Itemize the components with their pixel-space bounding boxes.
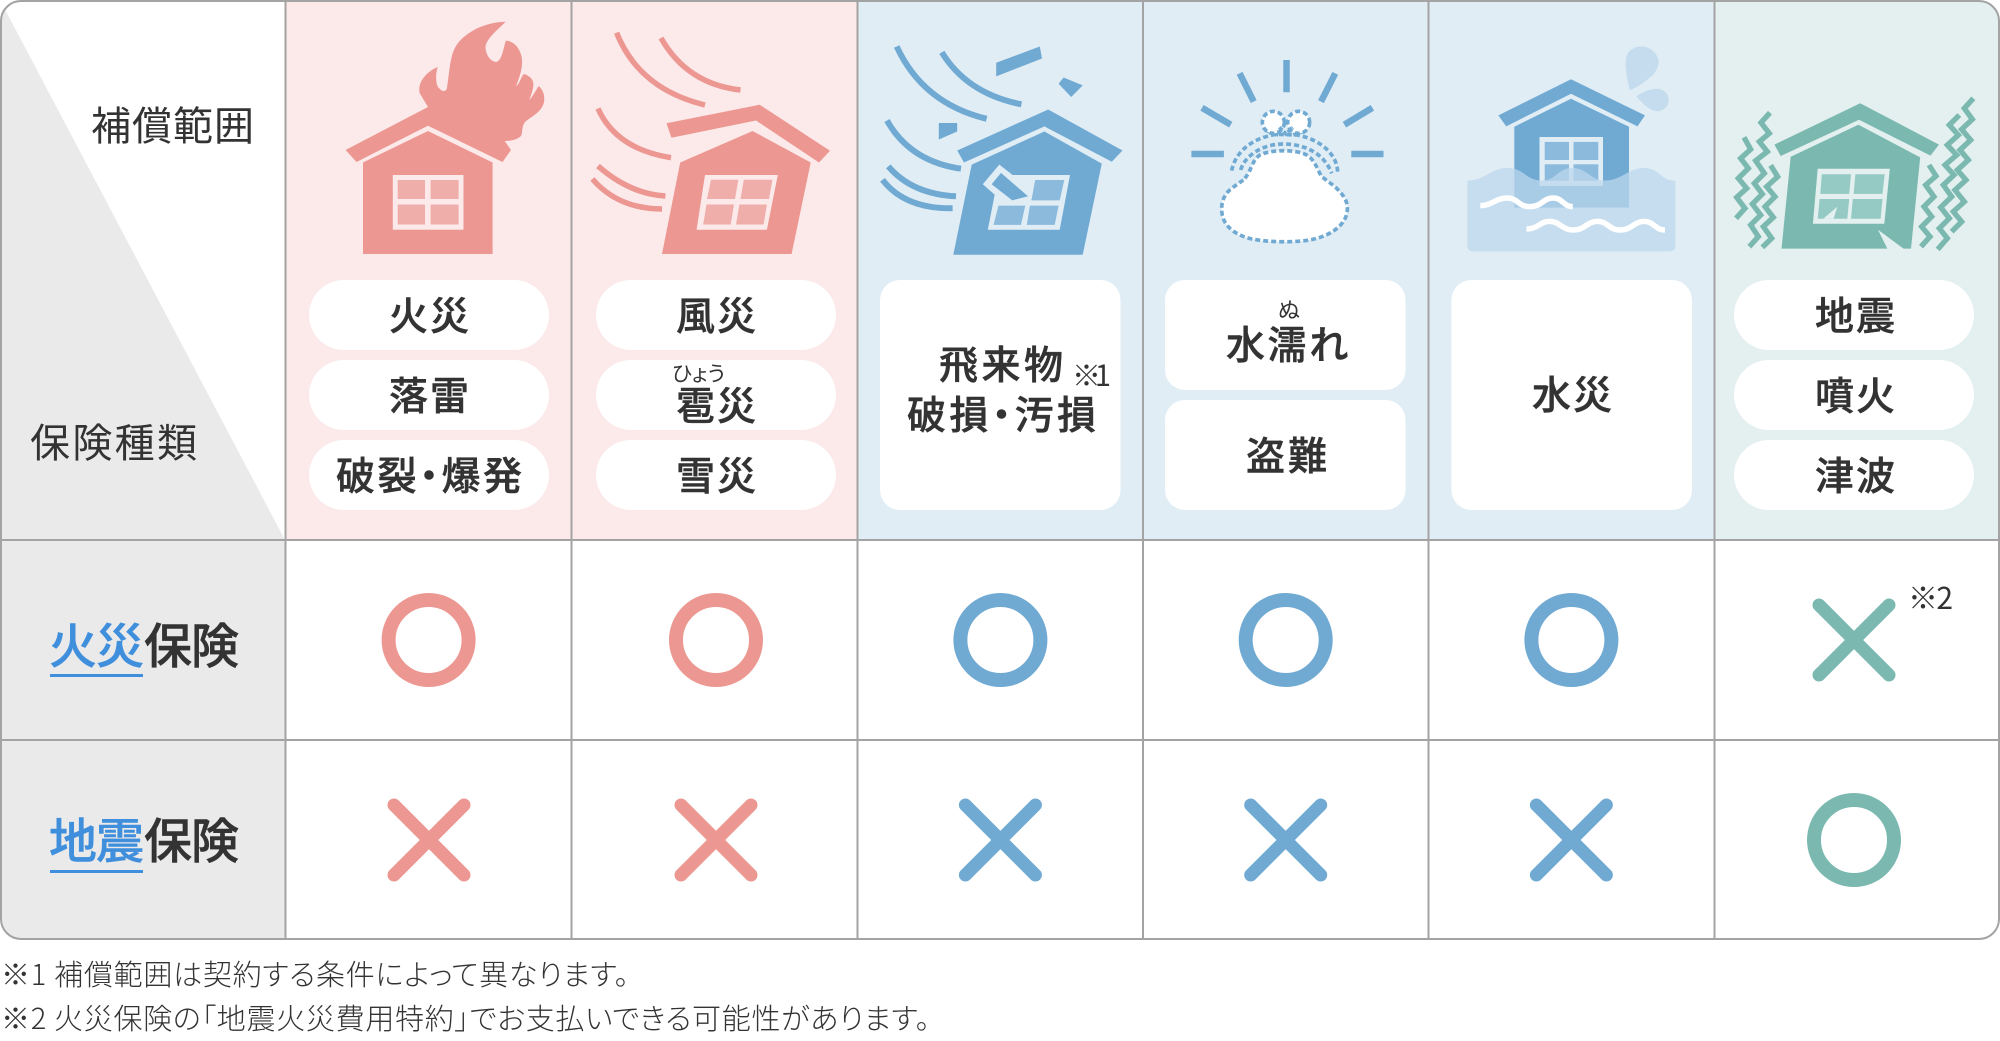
mark: cross wind (681, 805, 751, 875)
card: flying object damage: ※1 (1072, 353, 1111, 395)
icon: house in wind (592, 33, 830, 254)
row label: fire insurance (49, 607, 239, 677)
row label: fire insurance: 火災 (49, 607, 144, 677)
mark: circle wind (676, 600, 756, 680)
mark: circle fire (389, 600, 469, 680)
panel: earthquake column (1715, 1, 2000, 540)
heading: coverage scope: 補償範囲 (91, 94, 254, 152)
row label: earthquake insurance: 保険 (144, 802, 239, 872)
pill: explosion: 破裂・爆発 (336, 446, 522, 502)
pill: earthquake: 地震 (1815, 286, 1895, 342)
icon: house in earthquake (1736, 98, 1973, 249)
panel: fire insurance row (0, 541, 1953, 740)
footnote 1: ※1 補償範囲は契約する条件によって異なります。 (1, 952, 629, 994)
panel: fire column (286, 1, 572, 540)
mark: circle flying object (960, 600, 1040, 680)
pill: theft: 盗難 (1246, 426, 1327, 482)
card: flying object damage: 飛来物 (939, 335, 1063, 391)
mark: cross water leak (1251, 805, 1321, 875)
panel: flying object column (858, 1, 1143, 540)
icon: flooded house (1467, 46, 1675, 251)
mark: cross flood (1536, 805, 1606, 875)
panel: header corner (0, 0, 285, 540)
row label: fire insurance: 保険 (144, 607, 239, 677)
pill: explosion (309, 440, 549, 510)
pill: snow: 雪災 (676, 446, 756, 502)
pill: hail: ひょう (672, 358, 725, 388)
mark: circle flood (1531, 600, 1611, 680)
panel: wind column (572, 1, 858, 540)
pill: eruption (1734, 360, 1974, 430)
mark: cross flying object (965, 805, 1035, 875)
pill: earthquake (1734, 280, 1974, 350)
pill: water leak: ぬ (1278, 293, 1300, 325)
pill: tsunami: 津波 (1815, 446, 1895, 502)
row label: earthquake insurance (49, 802, 239, 873)
pill: fire (309, 280, 549, 350)
card: flying object damage: 破損・汚損 (907, 385, 1096, 441)
mark: circle earthquake (1814, 800, 1894, 880)
card: flood (1451, 280, 1692, 510)
mark: circle water leak (1246, 600, 1326, 680)
mark: cross fire (394, 805, 464, 875)
pill: eruption: 噴火 (1815, 366, 1895, 422)
pill: theft (1165, 400, 1406, 510)
pill: lightning: 落雷 (389, 366, 469, 422)
pill: tsunami (1734, 440, 1974, 510)
card: flood: 水災 (1532, 365, 1612, 421)
icon: purse (1191, 60, 1384, 242)
pill: water leak (1165, 280, 1406, 390)
card: flying object damage (880, 280, 1120, 510)
panel: water leak and theft column (1143, 1, 1429, 540)
pill: hail (596, 358, 836, 432)
row label: earthquake insurance: 地震 (49, 802, 144, 872)
icon: house on fire (346, 22, 544, 254)
pill: snow (596, 440, 836, 510)
panel: earthquake insurance row (0, 741, 1894, 939)
mark: cross earthquake (1819, 605, 1889, 675)
note marker 2: ※2 (1908, 574, 1953, 618)
panel: flood column (1429, 1, 1715, 540)
pill: water leak: 水濡れ (1226, 315, 1348, 371)
heading: insurance type: 保険種類 (30, 411, 197, 469)
pill: fire: 火災 (389, 286, 469, 342)
pill: wind: 風災 (676, 286, 756, 342)
pill: wind (596, 280, 836, 350)
icon: house hit by debris (882, 46, 1122, 255)
pill: lightning (309, 360, 549, 430)
footnote 2: ※2 火災保険の「地震火災費用特約」でお支払いできる可能性があります。 (1, 996, 930, 1038)
pill: hail: 雹災 (676, 376, 756, 432)
